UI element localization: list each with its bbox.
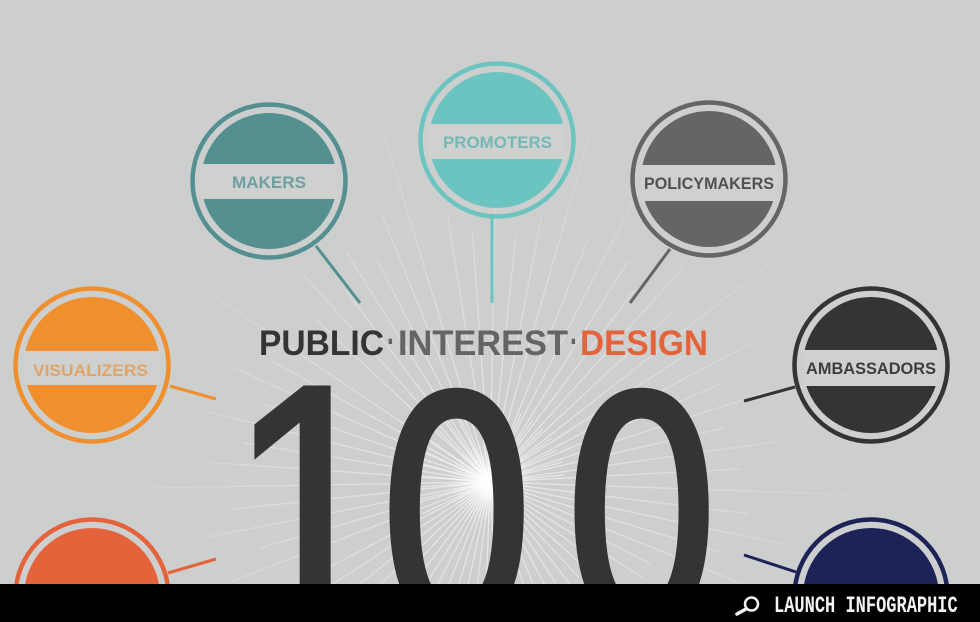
- title: Public Interest Design: [259, 322, 708, 363]
- badge: red (cropped): [16, 520, 216, 622]
- title: Public Interest Design: ·: [570, 322, 578, 361]
- title: Public Interest Design: ·: [387, 322, 395, 361]
- badge: navy (cropped): [744, 520, 948, 622]
- title: Public Interest Design: PUBLIC: [259, 324, 384, 363]
- title: Public Interest Design: DESIGN: [580, 324, 708, 363]
- badge: ambassadors: AMBASSADORS: [806, 359, 936, 378]
- sunburst rays: [140, 99, 915, 592]
- badge: policymakers: [630, 102, 786, 303]
- badge: makers: MAKERS: [232, 173, 306, 192]
- badge: promoters: [420, 64, 574, 303]
- badge: policymakers: POLICYMAKERS: [644, 174, 774, 193]
- footer bar: [0, 584, 980, 622]
- badge: visualizers: [16, 288, 216, 442]
- title: Public Interest Design: INTEREST: [398, 324, 568, 363]
- badge: ambassadors: [744, 288, 948, 442]
- icon: magnifier: [737, 598, 758, 614]
- badge: promoters: PROMOTERS: [443, 133, 552, 152]
- launch infographic label: LAUNCH INFOGRAPHIC: [774, 594, 958, 620]
- badge: makers: [192, 104, 360, 303]
- sunburst centre glow: [448, 440, 532, 524]
- badge: visualizers: VISUALIZERS: [33, 361, 148, 380]
